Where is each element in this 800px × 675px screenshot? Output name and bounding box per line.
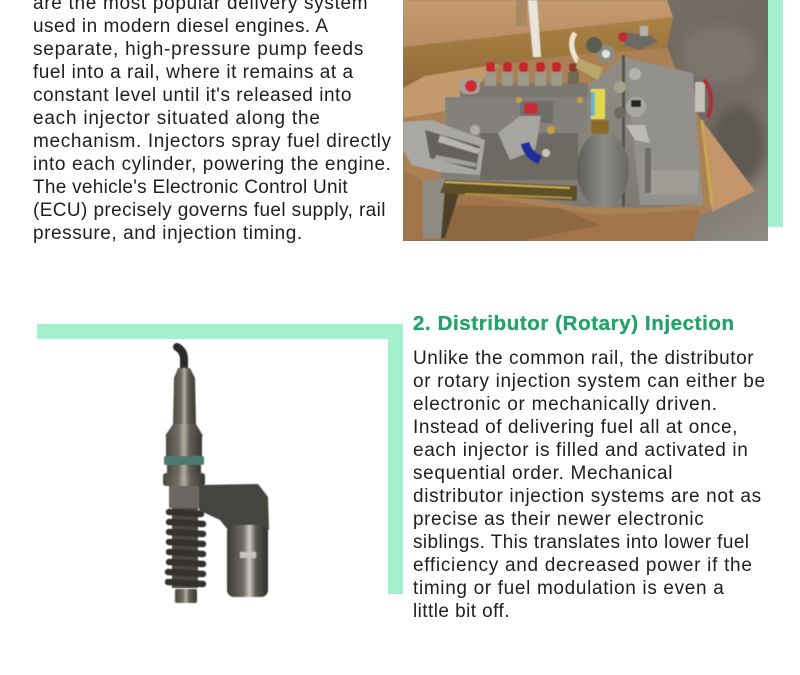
right end cap [695,82,705,112]
text block: common rail description: mechanism. Injectors spray fuel directly [33,131,392,152]
upper stem [173,368,196,426]
text block: common rail description: fuel into a rail, where it remains at a [33,62,354,83]
text block: common rail description: separate, high-pressure pump feeds [33,39,364,60]
photo: unit injector [162,342,270,604]
text block: common rail description: pressure, and injection timing. [33,223,303,244]
accent corner frame [37,324,403,594]
wire [177,347,184,370]
heading: distributor injection: 2. Distributor (Rotary) Injection [413,312,735,335]
text block: common rail description: (ECU) precisely governs fuel supply, rail [33,200,386,221]
top linkage [572,33,578,62]
bracket [199,484,269,530]
text block: distributor description: electronic or mechanically driven. [413,394,718,415]
text block: common rail description [33,0,392,244]
text block: distributor description: sequential order. Mechanical [413,463,673,484]
bell housing [577,132,629,208]
text block: distributor description: Instead of delivering fuel all at once, [413,417,738,438]
bolts [614,81,626,93]
text block: distributor description: distributor injection systems are not as [413,486,762,507]
text block: distributor description: siblings. This translates into lower fuel [413,532,749,553]
pump body [440,57,700,208]
text block: common rail description: constant level until it's released into [33,85,352,106]
text block: distributor description: Unlike the common rail, the distributor [413,348,754,369]
text block: distributor description: efficiency and decreased power if the [413,555,753,576]
gold base plate [440,180,577,201]
box upper [403,0,673,47]
text block: common rail description: used in modern diesel engines. A [33,16,329,37]
text block: common rail description: The vehicle's Electronic Control Unit [33,177,348,198]
accent bar: top right [768,0,783,227]
text block: distributor description: each injector is filled and activated in [413,440,748,461]
text block: distributor description: or rotary injection system can either be [413,371,766,392]
spring [172,508,198,588]
red fitting and blue hose [524,103,538,114]
label [591,89,605,119]
text block: distributor description [413,348,766,622]
collars [166,436,202,458]
photo: fuel injection pump on cardboard box [403,0,768,241]
text block: common rail description: into each cylinder, powering the engine. [33,154,392,175]
red caps row [485,62,579,86]
intake casting left [403,120,485,175]
housing right [625,58,703,205]
text block: common rail description: each injector situated along the [33,108,321,129]
text block: distributor description: timing or fuel modulation is even a [413,578,724,599]
box lower flaps [403,48,755,241]
text block: distributor description: little bit off. [413,601,510,622]
text block: distributor description: precise as their newer electronic [413,509,704,530]
plunger body [227,525,268,597]
